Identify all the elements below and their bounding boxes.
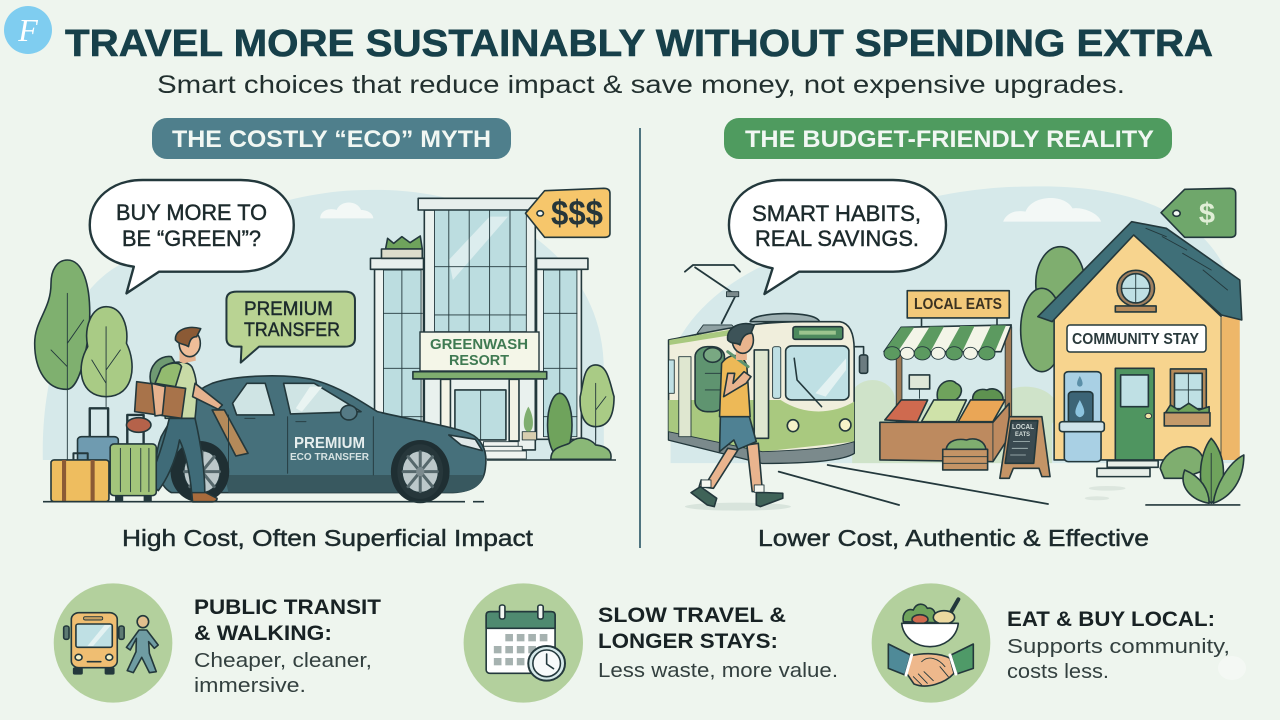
trees left [35, 260, 132, 460]
logo badge: F [17, 12, 38, 48]
speech bubble: buy more to be green [90, 180, 294, 293]
premium eco transfer car [157, 376, 486, 503]
heading pill: the budget-friendly reality: THE BUDGET-FRIENDLY REALITY [745, 126, 1154, 153]
community stay house [1021, 222, 1242, 477]
icon: salad bowl and handshake [872, 583, 990, 703]
premium eco transfer car: ECO TRANSFER [290, 452, 370, 463]
heading: LONGER STAYS: [598, 630, 778, 653]
speech bubble: premium transfer: PREMIUM [244, 298, 333, 320]
heading: PUBLIC TRANSIT [194, 596, 381, 619]
description: Cheaper, cleaner, [194, 650, 372, 672]
speech bubble: smart habits: SMART HABITS, [752, 201, 921, 226]
hotel building [370, 198, 588, 459]
description [194, 650, 372, 697]
speech bubble: buy more to be green: BE “GREEN”? [122, 226, 261, 251]
market stall: LOCAL EATS [914, 296, 1002, 313]
community stay house: COMMUNITY STAY [1072, 331, 1200, 348]
market stall: EATS [1015, 431, 1031, 438]
heading pill: the costly eco myth: THE COSTLY “ECO” MYTH [172, 126, 491, 153]
heading [194, 596, 381, 645]
heading [598, 604, 786, 653]
tram [669, 265, 868, 463]
sky backdrop [664, 186, 1244, 513]
caption: lower cost: Lower Cost, Authentic & Effective [758, 525, 1149, 551]
heading pill: the costly eco myth [152, 118, 511, 159]
benefit: slow travel and longer stays [464, 583, 838, 703]
heading: SLOW TRAVEL & [598, 604, 786, 627]
description: Less waste, more value. [598, 660, 838, 682]
speech bubble: buy more to be green: BUY MORE TO [116, 200, 267, 225]
premium eco transfer car: PREMIUM [294, 435, 365, 452]
title: TRAVEL MORE SUSTAINABLY WITHOUT SPENDING EXTRA [65, 23, 1213, 65]
panel: costly eco myth scene [35, 180, 616, 503]
benefit: public transit and walking [54, 583, 381, 703]
sky backdrop [43, 190, 604, 460]
trees right [548, 365, 614, 459]
logo badge [4, 6, 52, 54]
leafy plant [1146, 438, 1244, 505]
tram tracks [685, 465, 1126, 511]
hotel sign: RESORT [449, 353, 509, 369]
speech bubble: smart habits [729, 180, 946, 294]
market stall: LOCAL [1012, 424, 1035, 431]
benefit: eat and buy local [872, 583, 1230, 703]
speech bubble: smart habits: REAL SAVINGS. [755, 226, 919, 251]
hotel sign [420, 332, 539, 371]
speech bubble: premium transfer [226, 292, 355, 363]
description [1007, 636, 1230, 683]
traveler with bags [135, 327, 222, 502]
heading: & WALKING: [194, 622, 332, 645]
heading: EAT & BUY LOCAL: [1007, 608, 1215, 631]
speech bubble: premium transfer: TRANSFER [244, 319, 340, 341]
walking traveler with backpack [691, 324, 783, 507]
price tag: $: $ [1199, 198, 1215, 230]
description: costs less. [1007, 661, 1109, 683]
hotel sign: GREENWASH [430, 337, 528, 353]
caption: high cost: High Cost, Often Superficial Impact [122, 525, 534, 551]
icon: bus and pedestrian [54, 583, 172, 703]
luggage [51, 408, 156, 502]
panel: budget-friendly reality scene [664, 186, 1244, 513]
price tag: $$$: $$$ [551, 194, 603, 233]
icon: calendar and clock [464, 583, 583, 703]
description: Supports community, [1007, 636, 1230, 658]
market stall [880, 291, 1050, 478]
subtitle: Smart choices that reduce impact & save money, not expensive upgrades. [157, 71, 1125, 99]
price tag: $$$ [526, 188, 610, 237]
description: immersive. [194, 675, 306, 697]
heading pill: the budget-friendly reality [724, 118, 1172, 159]
price tag: $ [1161, 188, 1236, 237]
